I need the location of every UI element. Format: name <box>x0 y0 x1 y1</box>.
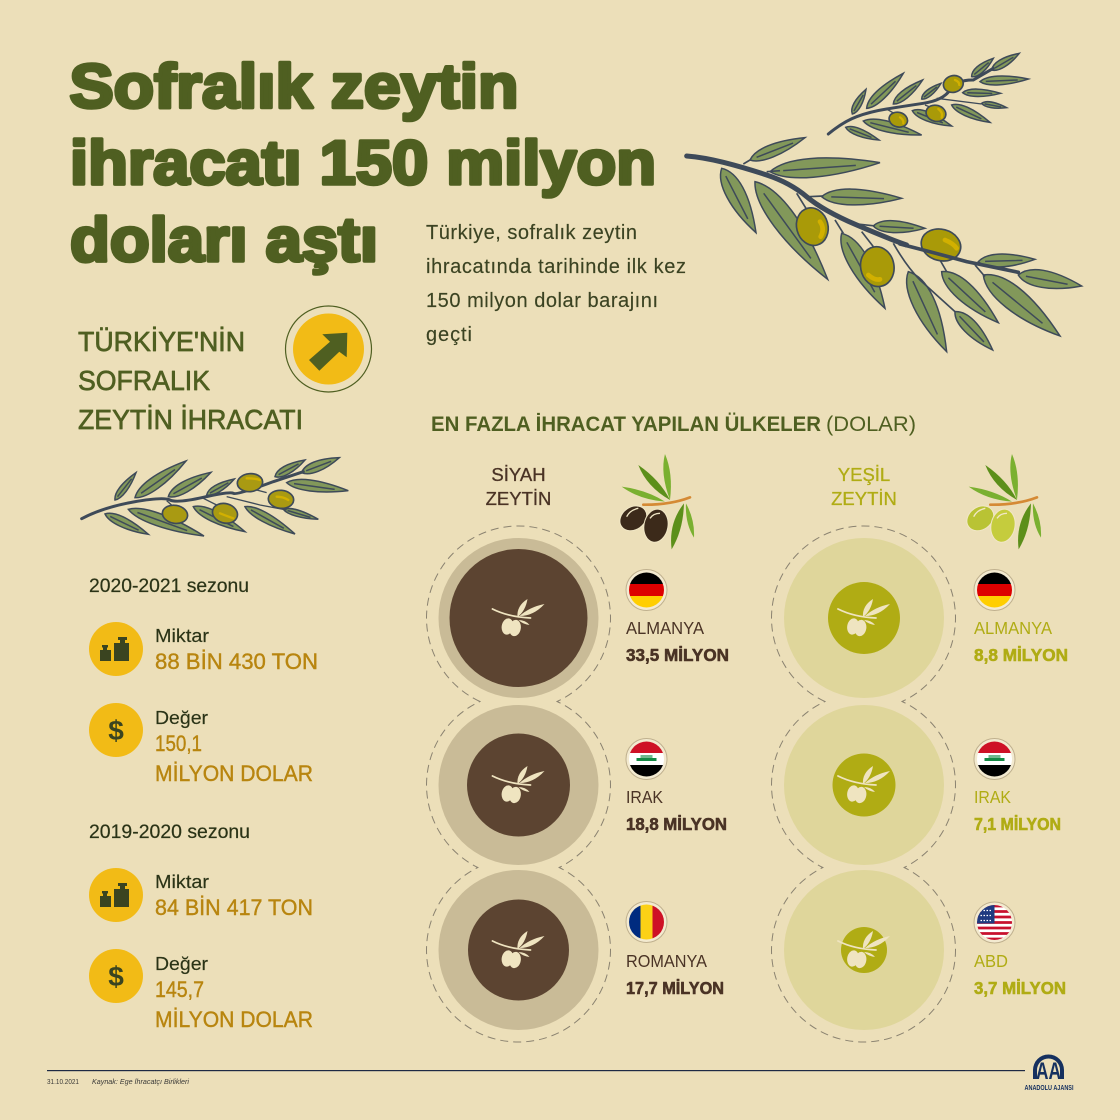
icon: green olives <box>962 454 1041 549</box>
quantity 2020-2021 <box>155 625 318 674</box>
value 2019-2020: Değer <box>155 953 208 974</box>
label: Irak black olive: IRAK <box>626 787 663 807</box>
label: Romanya black olive: ROMANYA <box>626 951 707 971</box>
label: Almanya black olive <box>626 618 729 665</box>
flag: Germany <box>626 570 667 610</box>
value 2019-2020: 145,7 <box>155 977 204 1002</box>
flag: Iraq green column <box>974 738 1015 780</box>
black olive heading: ZEYTİN <box>486 488 551 509</box>
label: Almanya black olive: 33,5 MİLYON <box>626 645 729 665</box>
label: ABD green olive: ABD <box>974 951 1008 971</box>
title: ihracatı 150 milyon <box>70 129 656 198</box>
green olive heading <box>831 464 897 509</box>
season 2019-2020 label: 2019-2020 sezonu <box>89 822 250 843</box>
label: Almanya green olive: ALMANYA <box>974 618 1052 638</box>
section heading: top export countries: (DOLAR) <box>826 413 916 436</box>
illustration: small olive branch top right <box>828 50 1029 143</box>
label: Irak black olive <box>626 787 727 834</box>
footer date and source <box>47 1078 189 1086</box>
footer date and source: Kaynak: Ege İhracatçı Birlikleri <box>92 1078 189 1086</box>
illustration: olive branch left <box>82 453 349 542</box>
icon: black olives <box>615 454 694 549</box>
icon: dollar 2019-2020: $ <box>108 961 124 992</box>
intro text: 150 milyon dolar barajını <box>426 290 658 312</box>
value 2020-2021 <box>155 707 313 786</box>
logo: Anadolu Ajansı: AA <box>1036 1058 1061 1085</box>
label: Almanya green olive <box>974 618 1068 665</box>
bubble: Almanya green olive <box>784 538 944 698</box>
value 2019-2020 <box>155 953 313 1032</box>
bubble: Irak green olive <box>784 705 944 865</box>
green olive heading: ZEYTİN <box>831 488 897 509</box>
label: ABD green olive <box>974 951 1066 998</box>
icon: weights 2020-2021 <box>89 622 143 676</box>
green olive heading: YEŞİL <box>838 464 890 485</box>
logo: Anadolu Ajansı: ANADOLU AJANSI <box>1024 1083 1074 1092</box>
label: ABD green olive: 3,7 MİLYON <box>974 978 1066 998</box>
title: doları aştı <box>70 206 378 275</box>
intro text: ihracatında tarihinde ilk kez <box>426 256 686 278</box>
footer date and source: 31.10.2021 <box>47 1079 79 1086</box>
black olive heading: SİYAH <box>491 464 546 485</box>
heading: Türkiye'nin sofralık zeytin ihracatı: SOFRALIK <box>78 365 210 396</box>
heading: Türkiye'nin sofralık zeytin ihracatı: ZEYTİN İHRACATI <box>78 404 303 435</box>
heading: Türkiye'nin sofralık zeytin ihracatı: TÜRKİYE'NİN <box>78 326 245 357</box>
quantity 2020-2021: Miktar <box>155 625 209 646</box>
flag: USA <box>974 902 1015 943</box>
icon: dollar 2020-2021 <box>89 703 143 757</box>
intro text: Türkiye, sofralık zeytin <box>426 222 637 244</box>
bubble: Almanya black olive <box>438 538 598 698</box>
black olive heading <box>486 464 551 509</box>
flag: Romania <box>626 902 667 942</box>
title <box>70 52 656 275</box>
bubble: Romanya black olive <box>438 870 598 1030</box>
value 2020-2021: MİLYON DOLAR <box>155 761 313 786</box>
logo: Anadolu Ajansı <box>1024 1054 1074 1092</box>
icon: dollar 2020-2021: $ <box>108 715 124 746</box>
value 2020-2021: 150,1 <box>155 731 202 756</box>
label: Almanya green olive: 8,8 MİLYON <box>974 645 1068 665</box>
bubble: ABD green olive <box>784 870 944 1030</box>
label: Irak green olive: IRAK <box>974 787 1011 807</box>
icon: dollar 2019-2020 <box>89 949 143 1003</box>
title: Sofralık zeytin <box>70 52 518 122</box>
icon: weights 2019-2020 <box>89 868 143 922</box>
intro text <box>426 222 686 346</box>
heading: Türkiye'nin sofralık zeytin ihracatı <box>78 326 303 435</box>
value 2019-2020: MİLYON DOLAR <box>155 1007 313 1032</box>
label: Irak green olive: 7,1 MİLYON <box>974 814 1061 834</box>
section heading: top export countries: EN FAZLA İHRACAT YAPILAN ÜLKELER <box>431 413 821 436</box>
quantity 2020-2021: 88 BİN 430 TON <box>155 649 318 674</box>
bubble column: black olives <box>426 526 611 1042</box>
quantity 2019-2020 <box>155 871 313 920</box>
quantity 2019-2020: 84 BİN 417 TON <box>155 895 313 920</box>
label: Irak black olive: 18,8 MİLYON <box>626 814 727 834</box>
value 2020-2021: Değer <box>155 707 208 728</box>
bubble: Irak black olive <box>438 705 598 865</box>
intro text: geçti <box>426 324 472 346</box>
flag: Iraq <box>626 738 667 780</box>
season 2020-2021 label: 2020-2021 sezonu <box>89 576 249 597</box>
label: Romanya black olive <box>626 951 724 998</box>
quantity 2019-2020: Miktar <box>155 871 209 892</box>
bubble column: green olives <box>772 526 956 1042</box>
icon: up arrow <box>286 306 372 392</box>
footer rule <box>47 1070 1025 1071</box>
label: Irak green olive <box>974 787 1061 834</box>
label: Almanya black olive: ALMANYA <box>626 618 704 638</box>
illustration: large olive branch top right <box>687 132 1083 356</box>
flag: Germany green column <box>974 570 1015 610</box>
label: Romanya black olive: 17,7 MİLYON <box>626 978 724 998</box>
